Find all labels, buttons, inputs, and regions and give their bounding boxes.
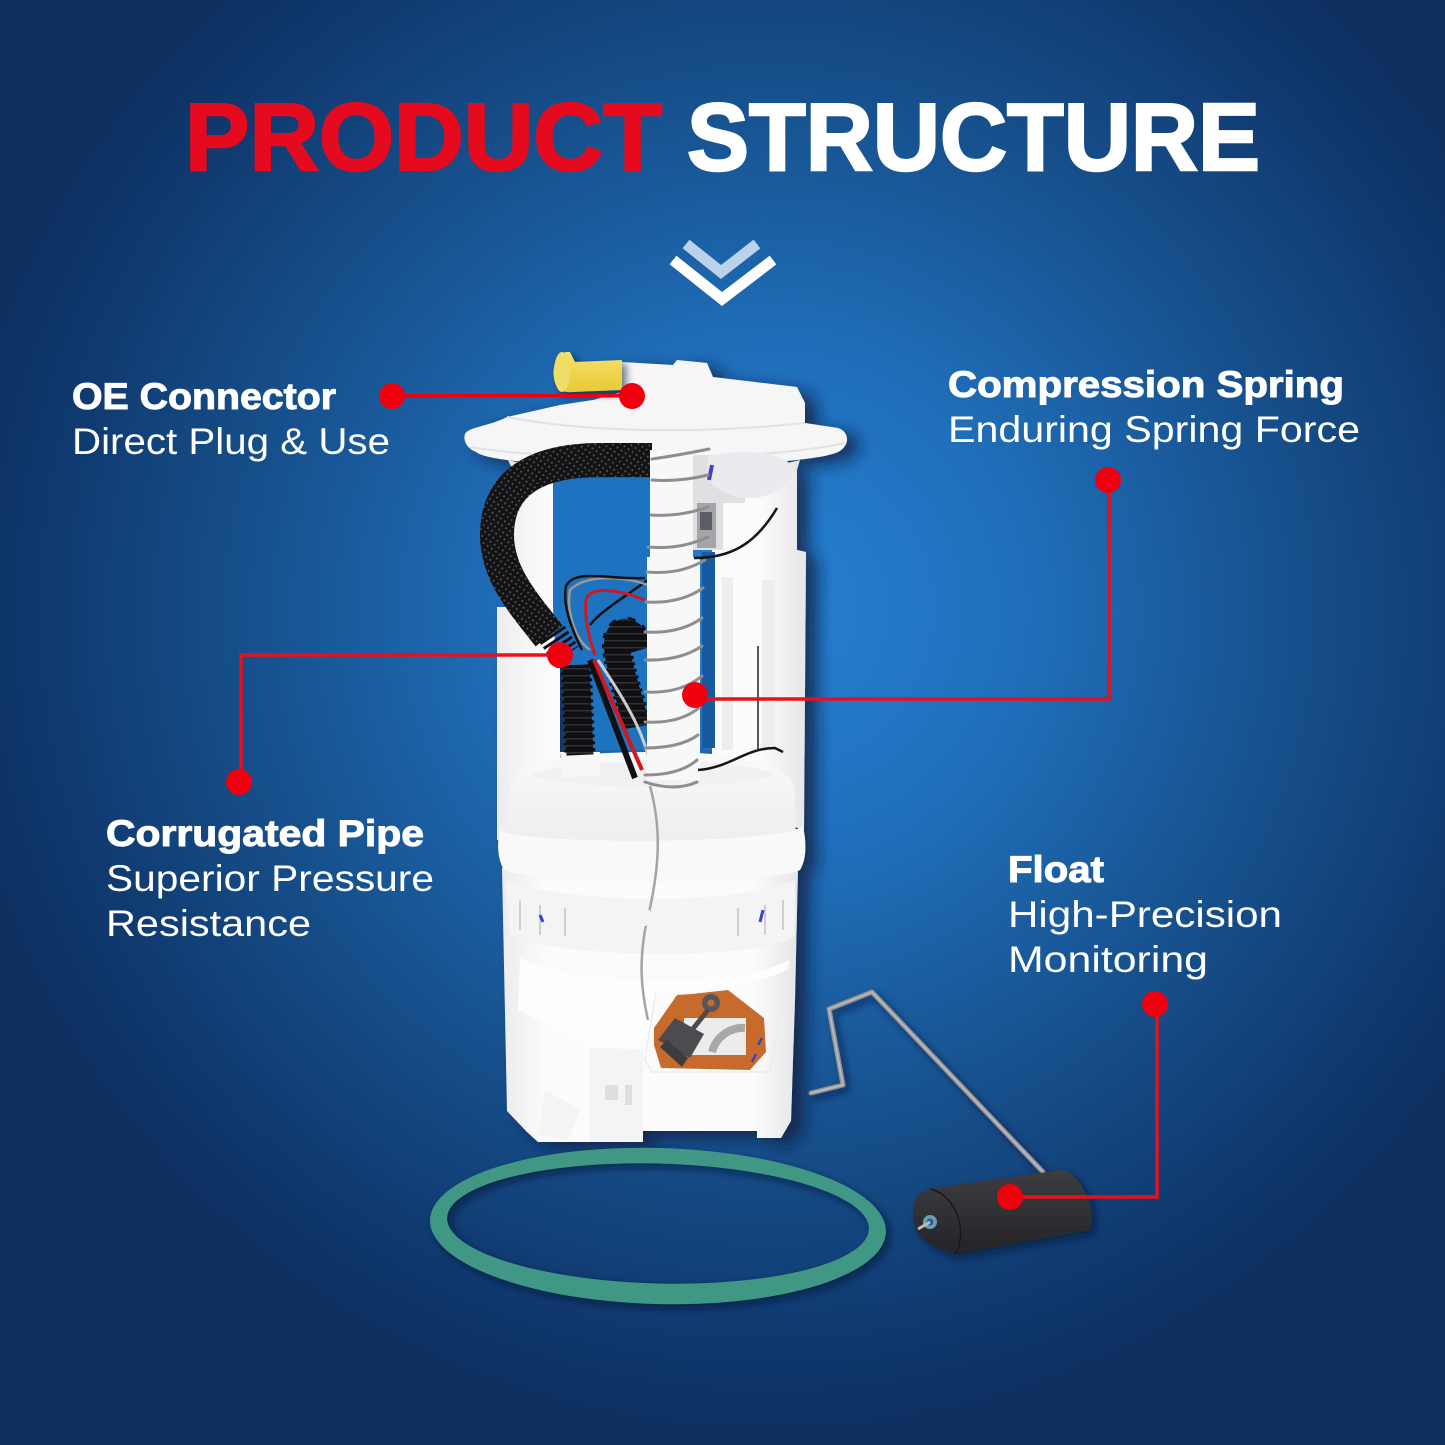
label: OE connector [72,376,390,462]
label: compression spring: Enduring Spring Force [948,409,1360,450]
callout line: OE connector [379,383,645,409]
wire clip [627,910,652,928]
bucket detail [505,880,795,1142]
window openings [553,478,650,750]
lower bucket [502,868,798,1142]
wires [565,576,652,780]
float [913,1170,1092,1254]
bowl well [530,761,775,787]
label: compression spring: Compression Spring [948,364,1344,405]
label: compression spring [948,364,1360,450]
bowl ring [498,826,805,881]
yellow connector cap [553,352,622,392]
label: float: Float [1008,849,1104,890]
title: PRODUCT [185,84,662,191]
callout line: corrugated pipe [226,642,573,795]
pump columns [497,465,806,840]
pump assembly [464,352,847,1142]
second corrugated pipe [617,632,640,727]
fuel bowl [507,752,796,860]
label: corrugated pipe [106,813,434,944]
label: OE connector: OE Connector [72,376,336,417]
black sender wires [694,508,783,770]
label: OE connector: Direct Plug & Use [72,421,390,462]
icon: double chevron arrow [673,244,773,299]
right column ribs [722,577,775,750]
compression spring [645,449,709,787]
title: STRUCTURE [687,84,1260,191]
float arm [811,992,1043,1172]
braided hose [497,460,652,655]
green o-ring seal [428,1142,888,1310]
label: corrugated pipe: Resistance [106,903,311,944]
center column [647,450,700,780]
orange sender card [654,990,766,1070]
flange shading [470,417,845,458]
flange cap [464,360,847,466]
callout line: float [997,991,1168,1210]
title [185,84,1260,191]
label: corrugated pipe: Superior Pressure [106,858,434,899]
label: float [1008,849,1282,980]
outlet fitting [560,752,600,778]
float wire [642,786,658,1020]
lower corrugated pipe [576,665,580,755]
fuel level bracket [650,452,793,550]
label: float: Monitoring [1008,939,1208,980]
thin vertical wire [757,646,759,750]
label: corrugated pipe: Corrugated Pipe [106,813,424,854]
label: float: High-Precision [1008,894,1282,935]
callout line: compression spring [682,467,1121,708]
